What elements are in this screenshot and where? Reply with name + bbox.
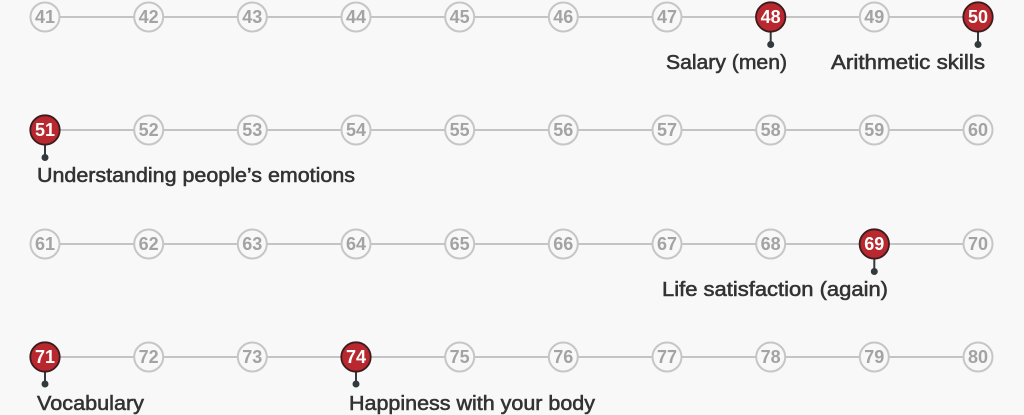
age 50 highlighted: Arithmetic skills [831, 2, 993, 74]
age 41: 41 [35, 7, 55, 27]
age 71 highlighted: Vocabulary [30, 342, 144, 415]
timeline row: ages 41 to 50 [30, 2, 993, 74]
age 49 [860, 2, 889, 32]
age 42: 42 [139, 7, 159, 27]
age 53: 53 [242, 120, 262, 140]
age 50 highlighted: Arithmetic skills: Arithmetic skills [831, 52, 985, 74]
age 44: 44 [346, 7, 366, 27]
age 42 [134, 2, 163, 32]
age 52: 52 [139, 120, 159, 140]
age 75 [445, 342, 474, 372]
age 52 [134, 116, 163, 144]
age 70 [964, 230, 992, 258]
age 67: 67 [657, 234, 677, 254]
age 48 highlighted: Salary (men) [666, 2, 787, 74]
age 77: 77 [657, 347, 677, 367]
age 76 [549, 342, 578, 372]
age 48 highlighted: Salary (men): 48 [761, 7, 781, 27]
age 74 highlighted: Happiness with your body [341, 342, 595, 415]
age 49: 49 [864, 7, 884, 27]
age 57: 57 [657, 120, 677, 140]
age 45 [445, 2, 474, 32]
age 70: 70 [968, 234, 988, 254]
timeline row: ages 51 to 60 [30, 115, 993, 187]
age 69 highlighted: Life satisfaction (again) [662, 229, 889, 301]
age 69 highlighted: Life satisfaction (again): Life satisfaction (again) [662, 279, 888, 301]
age 46: 46 [553, 7, 573, 27]
age 74 highlighted: Happiness with your body: 74 [346, 347, 366, 367]
age 57 [652, 116, 682, 144]
age 73: 73 [242, 347, 262, 367]
age 56 [549, 116, 578, 144]
age 71 highlighted: Vocabulary: Vocabulary [37, 393, 144, 415]
age 45: 45 [450, 7, 470, 27]
age 58 [756, 116, 785, 144]
age 80 [964, 342, 992, 372]
age 72 [134, 342, 163, 372]
age 68 [756, 230, 785, 258]
age 58: 58 [761, 120, 781, 140]
age 72: 72 [139, 347, 159, 367]
age 77 [652, 342, 682, 372]
age 51 highlighted: Understanding people's emotions [30, 115, 355, 187]
age 63 [238, 230, 267, 258]
age 62 [134, 230, 163, 258]
age 64 [342, 230, 370, 258]
timeline row: ages 71 to 80 [30, 342, 993, 415]
age 50 highlighted: Arithmetic skills: 50 [968, 7, 988, 27]
age 67 [652, 230, 682, 258]
age 44 [342, 2, 370, 32]
age 43 [238, 2, 267, 32]
age 66 [549, 230, 578, 258]
age 43: 43 [242, 7, 262, 27]
age 68: 68 [761, 234, 781, 254]
age 64: 64 [346, 234, 366, 254]
age 69 highlighted: Life satisfaction (again): 69 [864, 234, 884, 254]
age 66: 66 [553, 234, 573, 254]
age 60 [964, 116, 992, 144]
age 65 [445, 230, 474, 258]
age 61 [30, 230, 60, 258]
age 41 [30, 2, 60, 32]
age 78: 78 [761, 347, 781, 367]
age 60: 60 [968, 120, 988, 140]
age 73 [238, 342, 267, 372]
age 76: 76 [553, 347, 573, 367]
age 62: 62 [139, 234, 159, 254]
timeline row: ages 61 to 70 [30, 229, 992, 301]
age 54 [342, 116, 370, 144]
age 51 highlighted: Understanding people's emotions: Understanding people’s emotions [37, 165, 355, 187]
age 53 [238, 116, 267, 144]
age 74 highlighted: Happiness with your body: Happiness with your body [349, 393, 595, 415]
age 79: 79 [864, 347, 884, 367]
age 55 [445, 116, 474, 144]
age 78 [756, 342, 785, 372]
age 48 highlighted: Salary (men): Salary (men) [666, 52, 787, 74]
age 59 [860, 116, 889, 144]
age 51 highlighted: Understanding people's emotions: 51 [35, 120, 55, 140]
age 80: 80 [968, 347, 988, 367]
age 54: 54 [346, 120, 366, 140]
age 71 highlighted: Vocabulary: 71 [35, 347, 55, 367]
age 56: 56 [553, 120, 573, 140]
age 59: 59 [864, 120, 884, 140]
age 79 [860, 342, 889, 372]
age 63: 63 [242, 234, 262, 254]
age 46 [549, 2, 578, 32]
age 47 [652, 2, 682, 32]
age 61: 61 [35, 234, 55, 254]
age 47: 47 [657, 7, 677, 27]
age 75: 75 [450, 347, 470, 367]
age 55: 55 [450, 120, 470, 140]
age 65: 65 [450, 234, 470, 254]
